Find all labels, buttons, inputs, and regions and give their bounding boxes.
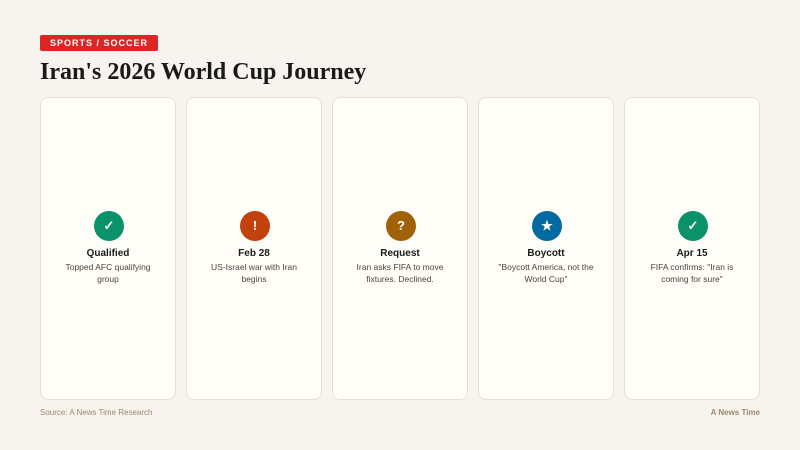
card text: US-Israel war with Iran begins — [211, 262, 297, 284]
source: Source: A News Time Research — [40, 408, 152, 417]
card text: Iran asks FIFA to move fixtures. Declined. — [357, 262, 443, 284]
icon: check: ✓ — [688, 218, 698, 233]
card text: FIFA confirms: "Iran is coming for sure" — [651, 262, 733, 284]
card: feb 28 — [186, 97, 322, 400]
icon: check — [94, 211, 124, 241]
card: apr 15 — [624, 97, 760, 400]
icon: question: ? — [397, 218, 405, 233]
card: qualified — [40, 97, 176, 400]
card title: Apr 15 — [676, 248, 708, 259]
card text: "Boycott America, not the World Cup" — [498, 262, 594, 284]
card title: Qualified — [87, 248, 129, 259]
icon: check — [678, 211, 708, 241]
brand: A News Time — [711, 408, 760, 417]
icon: star — [532, 211, 562, 241]
card title: Feb 28 — [238, 248, 270, 259]
icon: star: ★ — [541, 218, 553, 233]
card: request — [332, 97, 468, 400]
card: boycott — [478, 97, 614, 400]
card text: Topped AFC qualifying group — [65, 262, 151, 284]
card title: Boycott — [527, 248, 565, 259]
icon: check: ✓ — [104, 218, 114, 233]
card title: Request — [380, 248, 420, 259]
icon: exclamation — [240, 211, 270, 241]
title: Iran's 2026 World Cup Journey — [40, 59, 366, 85]
icon: question — [386, 211, 416, 241]
category tag — [40, 35, 158, 51]
icon: exclamation: ! — [253, 218, 257, 233]
category tag: SPORTS / SOCCER — [50, 38, 148, 48]
